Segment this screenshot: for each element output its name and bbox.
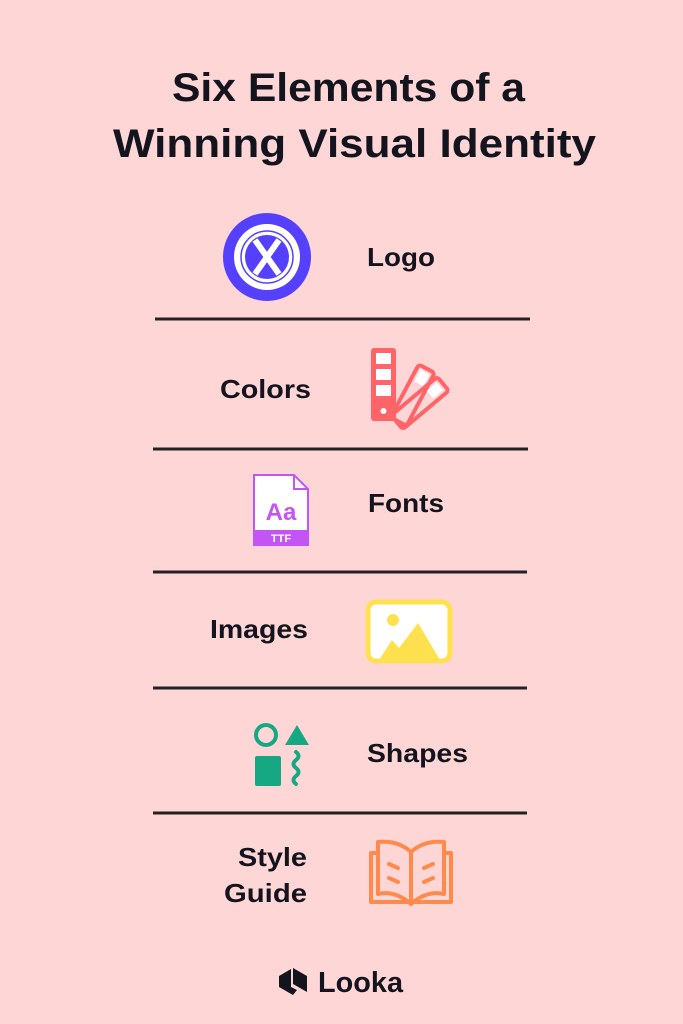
- icon: font file: Aa: [266, 499, 297, 526]
- row: fonts: [254, 475, 444, 545]
- label: Logo: Logo: [367, 242, 435, 272]
- title: Six Elements of a: [172, 66, 526, 110]
- row: shapes: [255, 725, 468, 786]
- label: Style Guide: Guide: [224, 878, 307, 908]
- row: images: [210, 602, 450, 661]
- title: [113, 66, 597, 166]
- label: Shapes: Shapes: [367, 738, 468, 768]
- icon: shapes: [255, 725, 309, 786]
- row: colors: [220, 348, 449, 429]
- icon: font file: [254, 475, 308, 545]
- row: logo: [223, 213, 435, 301]
- icon: image: [368, 602, 450, 661]
- icon: logo circle: [223, 213, 311, 301]
- icon: Looka mark: [279, 968, 307, 995]
- row: style guide: [224, 842, 451, 908]
- footer: Looka brand: [279, 967, 404, 999]
- label: Colors: Colors: [220, 374, 311, 404]
- icon: font file: TTF: [271, 533, 291, 545]
- icon: book: [371, 842, 451, 904]
- footer: Looka brand: Looka: [318, 967, 404, 999]
- label: Style Guide: Style: [238, 842, 307, 872]
- label: Images: Images: [210, 614, 308, 644]
- icon: color swatches: [371, 348, 449, 429]
- title: Winning Visual Identity: [113, 122, 597, 166]
- label: Fonts: Fonts: [368, 488, 444, 518]
